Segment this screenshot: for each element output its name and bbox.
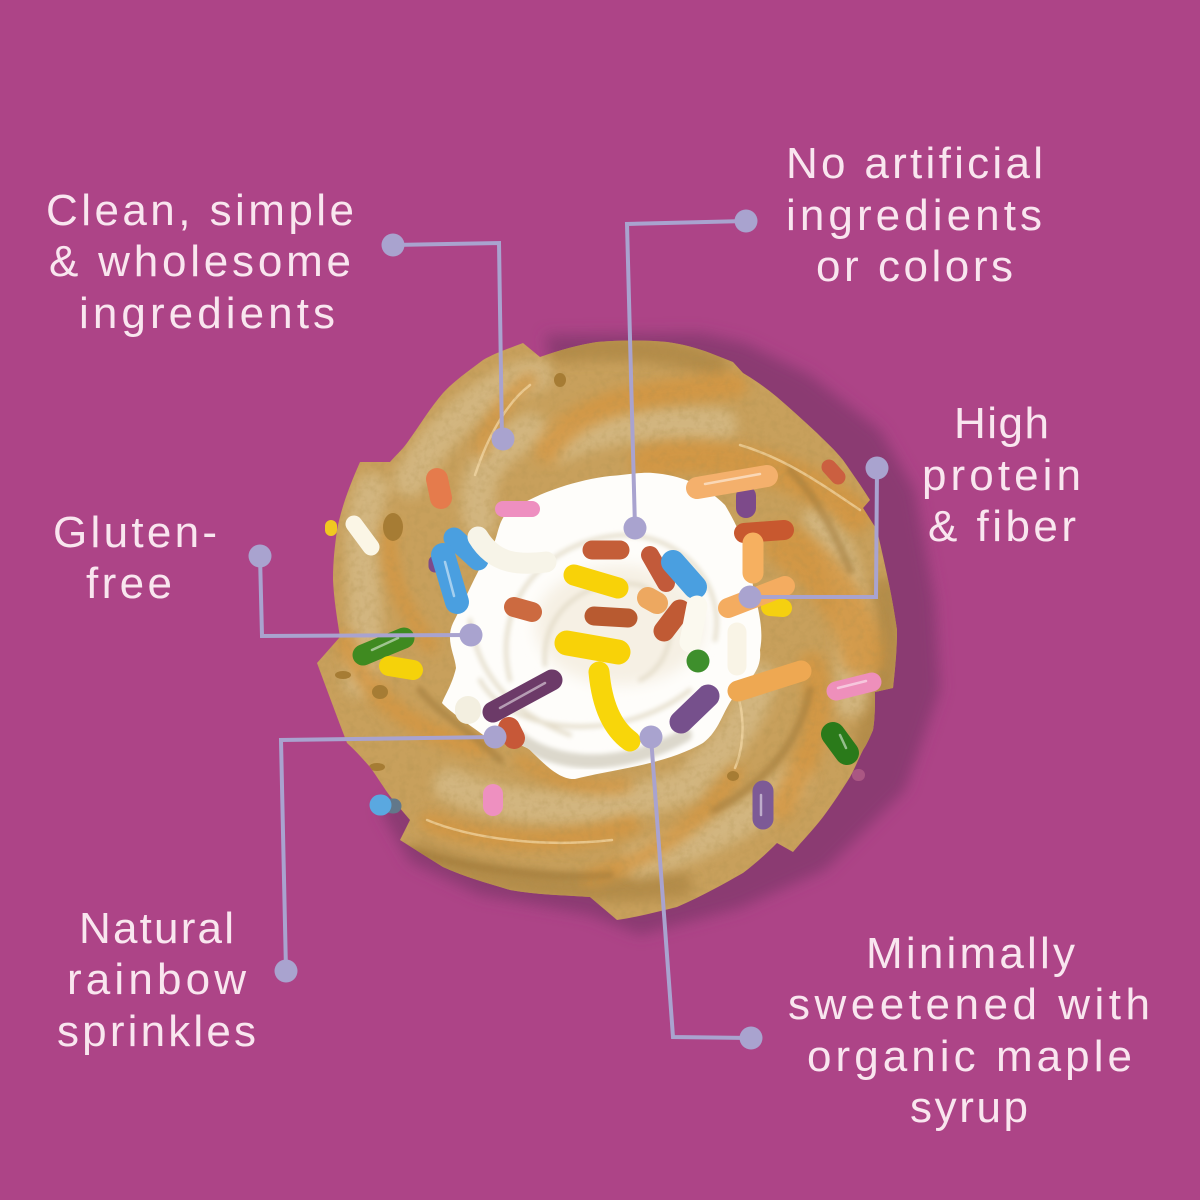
label text: or colors bbox=[816, 242, 1013, 291]
label text: syrup bbox=[910, 1083, 1028, 1132]
label text: ingredients bbox=[79, 289, 335, 338]
label text: protein bbox=[922, 451, 1081, 500]
cake with frosting and sprinkles bbox=[310, 330, 940, 935]
lower grey shading bbox=[515, 735, 685, 761]
crumb holes bbox=[335, 373, 739, 781]
label text: Gluten- bbox=[53, 508, 217, 557]
label text: Clean, simple bbox=[46, 186, 354, 235]
swirl ridges bbox=[333, 340, 897, 910]
frosting shading and swirl bbox=[470, 535, 717, 761]
callout: rainbow sprinkles bbox=[57, 726, 506, 1056]
sprinkles bbox=[331, 467, 872, 819]
thin glossy highlights bbox=[427, 385, 860, 843]
callout: no artificial bbox=[624, 139, 1043, 540]
crumb patches bbox=[360, 375, 854, 860]
leader dots bbox=[738, 456, 888, 608]
golden baked bands bbox=[345, 380, 862, 878]
callout: maple syrup bbox=[640, 726, 1150, 1132]
creamy centre bbox=[535, 565, 705, 685]
leader line bbox=[393, 243, 502, 440]
soft grooves bbox=[400, 470, 850, 876]
swirl creases bbox=[470, 535, 717, 735]
frosting bbox=[442, 473, 761, 779]
leader line bbox=[627, 221, 746, 528]
leader dots bbox=[624, 210, 758, 540]
label text: Minimally bbox=[866, 929, 1075, 978]
leader line bbox=[281, 737, 495, 971]
label text: & wholesome bbox=[49, 237, 351, 286]
callout: protein and fiber bbox=[738, 399, 1081, 608]
label text: rainbow bbox=[67, 955, 246, 1004]
label text: ingredients bbox=[786, 191, 1042, 240]
leader dots bbox=[248, 544, 482, 646]
callout: gluten-free bbox=[53, 508, 482, 646]
leader dots bbox=[382, 234, 514, 450]
label text: organic maple bbox=[807, 1032, 1132, 1081]
leader line bbox=[651, 737, 751, 1038]
label text: sweetened with bbox=[788, 980, 1150, 1029]
leader dots bbox=[640, 726, 762, 1050]
cake body bbox=[317, 340, 897, 920]
cake drop shadow bbox=[380, 333, 940, 935]
label text: No artificial bbox=[786, 139, 1043, 188]
leader line bbox=[260, 556, 471, 636]
label text: High bbox=[954, 399, 1049, 448]
label text: sprinkles bbox=[57, 1007, 256, 1056]
leader dots bbox=[274, 726, 506, 982]
label text: Natural bbox=[79, 904, 234, 953]
leader line bbox=[750, 468, 877, 597]
label text: & fiber bbox=[928, 502, 1076, 551]
callout: clean ingredients bbox=[46, 186, 514, 450]
crumb grain texture bbox=[336, 359, 875, 874]
darker outer layer bbox=[420, 348, 889, 889]
sprinkle gloss bbox=[372, 474, 866, 815]
label text: free bbox=[86, 559, 172, 608]
